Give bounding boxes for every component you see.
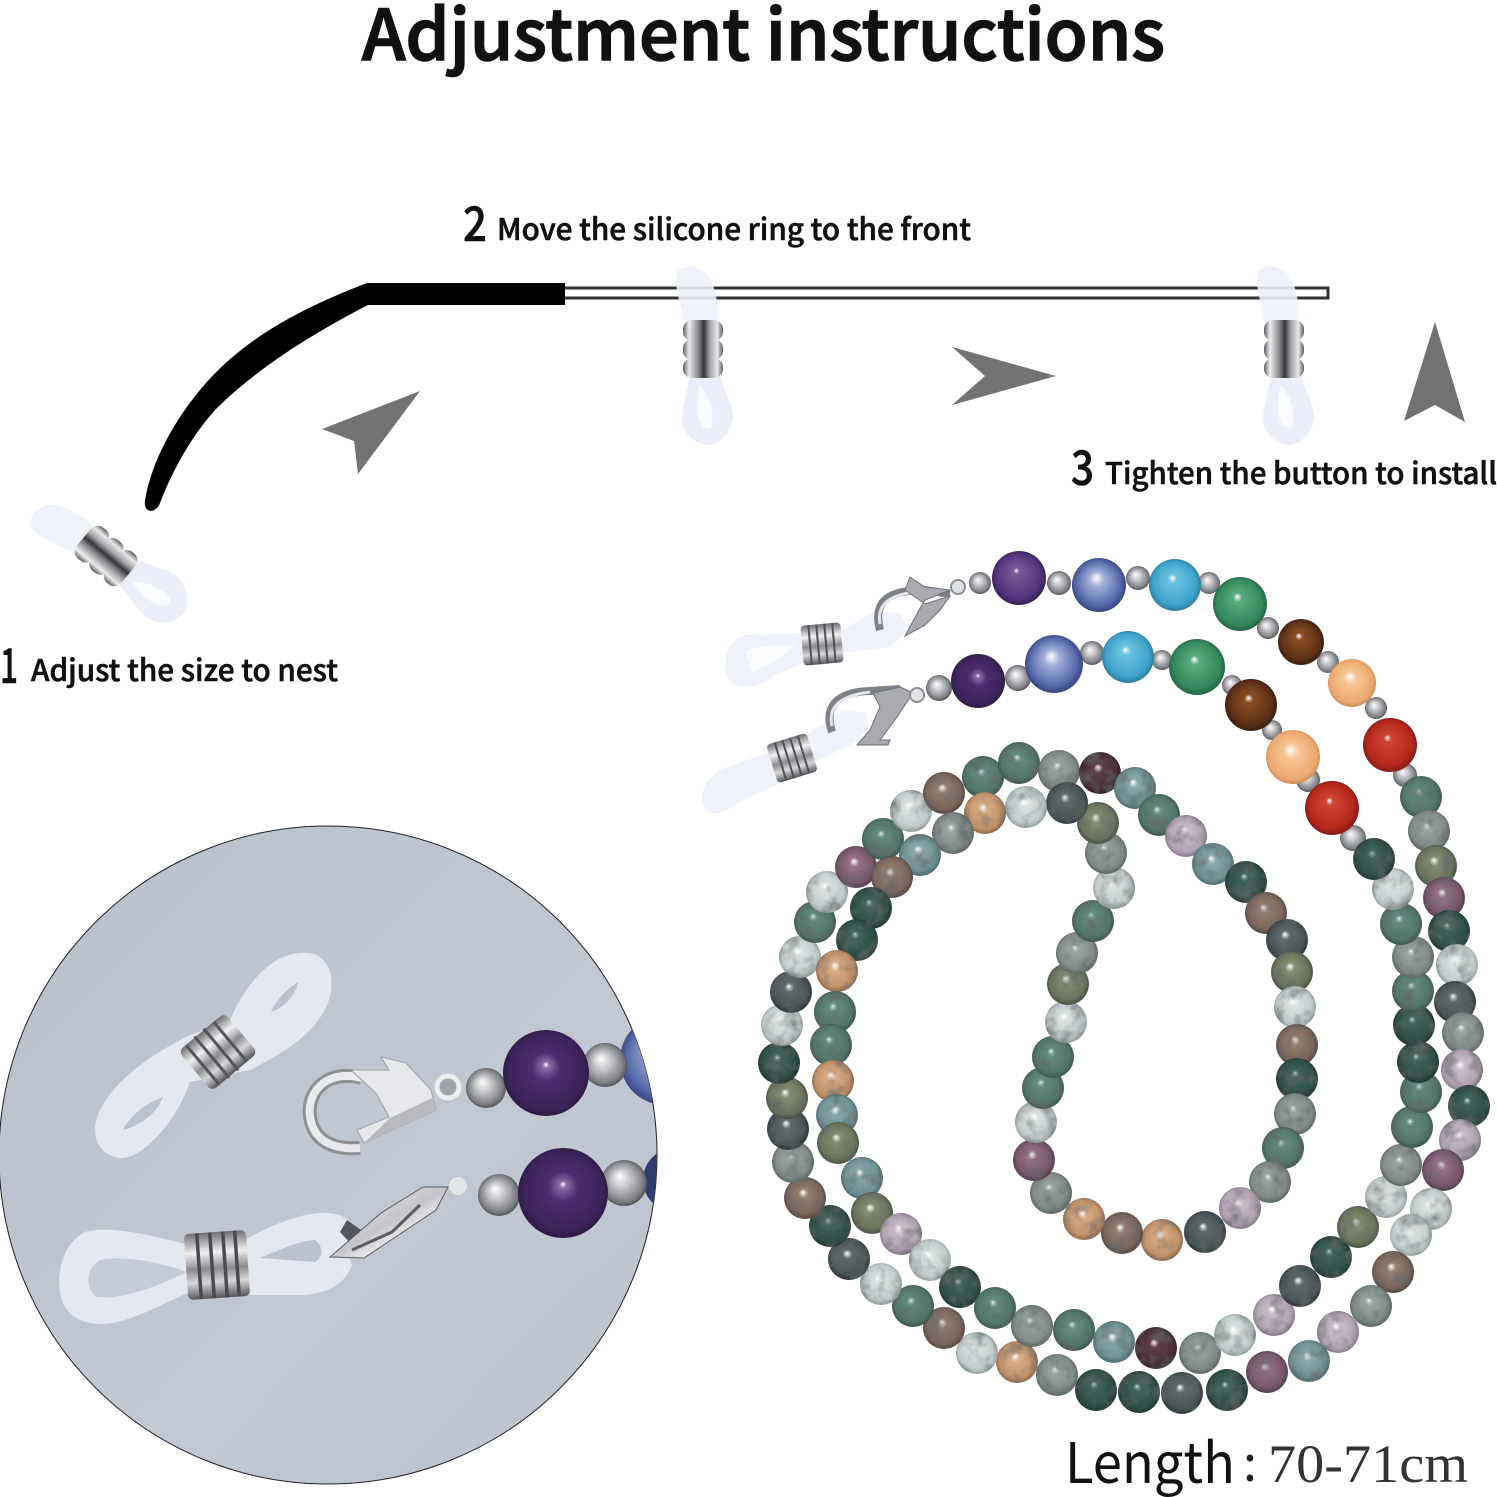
silicone ring close-up, top (95, 953, 331, 1158)
length label (1065, 1419, 1468, 1497)
amethyst beads and spacers (466, 1030, 657, 1238)
black temple tip (145, 283, 565, 511)
lower silicone ring and clasp (702, 687, 924, 813)
necklace (702, 551, 1490, 1414)
arrow: up (1404, 322, 1465, 422)
panel: close-up circle (0, 826, 710, 1484)
step 3 label (1071, 429, 1497, 499)
silicone ring: step 2 position (676, 267, 733, 445)
lobster clasp, bottom (330, 1177, 467, 1258)
step 2 label: Move the silicone ring to the front (497, 205, 971, 249)
gemstone bead section, lower strand (926, 631, 1366, 851)
gemstone bead section, upper strand (969, 551, 1417, 787)
step 2 label: 2 (463, 185, 487, 255)
jasper beads: outer strand (758, 742, 1490, 1414)
step 3 label: Tighten the button to install (1105, 449, 1497, 493)
silicone ring: step 1 position (25, 480, 199, 639)
upper silicone ring and clasp (725, 577, 965, 687)
silicone ring close-up, bottom (59, 1213, 355, 1324)
arrow: up-right (322, 391, 420, 474)
length label: : (1243, 1424, 1257, 1496)
step 2 label (463, 185, 971, 255)
glasses temple arm (145, 283, 1328, 511)
step 1 label: Adjust the size to nest (31, 646, 338, 690)
silicone ring: step 3 position (1257, 267, 1314, 445)
arrow: right (952, 347, 1056, 405)
length label: 70-71cm (1268, 1434, 1468, 1494)
step 1 label (0, 627, 338, 697)
step 1 label: 1 (0, 627, 18, 697)
lobster clasp, top (310, 1057, 459, 1148)
metal rod (565, 287, 1328, 299)
step 3 label: 3 (1071, 429, 1094, 499)
